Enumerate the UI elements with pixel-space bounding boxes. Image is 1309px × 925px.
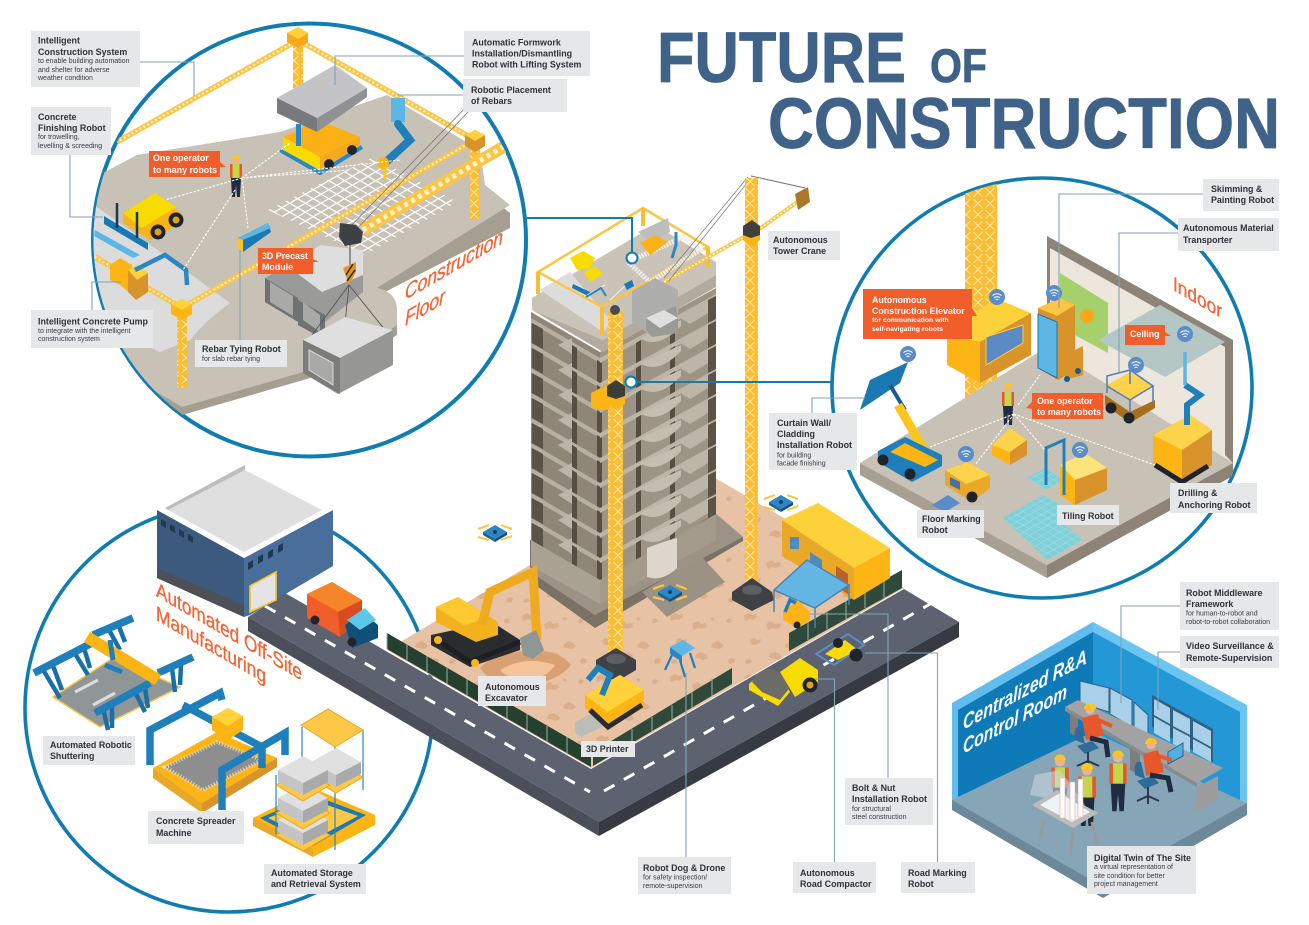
floor heading: Floor xyxy=(405,283,446,331)
label: intelligent concrete pump xyxy=(31,310,153,348)
robot: concrete pump xyxy=(110,255,187,300)
label: autonomous excavator: Excavator xyxy=(485,693,528,703)
material box xyxy=(992,428,1027,465)
drones xyxy=(478,495,798,602)
label: one operator construction floor xyxy=(149,151,226,177)
label: curtain wall: Installation Robot xyxy=(777,440,852,450)
worker xyxy=(230,155,242,197)
zoom connector: construction floor xyxy=(527,218,638,264)
label: curtain wall: Cladding xyxy=(777,429,815,439)
label: autonomous construction elevator: self-navigating robots xyxy=(872,326,943,333)
digital twin table xyxy=(1030,750,1127,855)
label: road marking robot: Robot xyxy=(908,879,934,889)
robot: concrete finishing xyxy=(94,193,184,258)
label: 3D precast module xyxy=(258,248,319,274)
robot: storage and retrieval xyxy=(253,709,375,857)
label: autonomous tower crane: Autonomous xyxy=(773,235,828,245)
label: autonomous construction elevator xyxy=(863,289,977,339)
label: automated robotic shuttering: Shuttering xyxy=(50,751,94,761)
scene: indoor xyxy=(860,180,1233,578)
label: road marking robot: Road Marking xyxy=(908,868,967,878)
scene: construction floor xyxy=(60,27,510,415)
robot: 3D printer xyxy=(575,668,644,737)
label: concrete finishing robot: levelling & screeding xyxy=(38,143,102,150)
label: robot middleware framework xyxy=(1180,582,1279,630)
operators xyxy=(1075,703,1172,804)
robot: dog xyxy=(665,640,695,677)
precast module on hook xyxy=(303,285,393,394)
truck xyxy=(307,582,378,648)
zoom connector: indoor xyxy=(626,376,833,388)
label: concrete spreader machine xyxy=(148,811,244,844)
label: concrete finishing robot: Concrete xyxy=(38,112,77,122)
label: one operator construction floor: One operator xyxy=(153,153,209,163)
title: FUTURE xyxy=(657,19,906,98)
label: digital twin of the site: Digital Twin of The Site xyxy=(1094,853,1191,863)
warehouse xyxy=(157,463,333,617)
label: 3D precast module: Module xyxy=(262,262,293,272)
label: digital twin of the site: site condition for better xyxy=(1094,873,1165,880)
label: autonomous road compactor: Road Compactor xyxy=(800,879,872,889)
wifi icons xyxy=(900,285,1193,462)
label: bolt and nut installation: for structural xyxy=(852,806,891,813)
label: skimming and painting robot: Painting Robot xyxy=(1211,195,1274,205)
label: autonomous excavator xyxy=(478,676,546,706)
panel: indoor xyxy=(832,178,1252,598)
label: intelligent construction system: weather condition xyxy=(37,75,93,82)
label: robot middleware framework: Robot Middleware xyxy=(1186,588,1262,598)
label: autonomous tower crane xyxy=(768,231,840,260)
circle outline: construction floor xyxy=(93,24,526,456)
label: curtain wall: for building xyxy=(777,452,811,460)
robot: road marking xyxy=(816,634,864,665)
label: digital twin of the site: project management xyxy=(1094,881,1158,888)
label: autonomous road compactor xyxy=(793,862,876,893)
robot: elevator xyxy=(947,298,1031,383)
floor xyxy=(952,732,1247,898)
floor heading xyxy=(405,233,502,326)
title xyxy=(657,19,1280,164)
label: autonomous excavator: Autonomous xyxy=(485,682,540,692)
label: automated robotic shuttering: Automated Robotic xyxy=(50,740,132,750)
label: curtain wall: Curtain Wall/ xyxy=(777,418,831,428)
label: robotic placement of rebars: Robotic Placement xyxy=(471,85,551,95)
robot: rebar tying xyxy=(238,223,271,252)
label: autonomous construction elevator: Construction Elevator xyxy=(872,306,965,316)
leader lines xyxy=(70,56,1203,862)
label: curtain wall: facade finishing xyxy=(777,460,826,468)
robot: excavator xyxy=(431,572,571,687)
robot: drilling and anchoring xyxy=(1153,352,1212,482)
label: ceiling: Ceiling xyxy=(1130,329,1160,339)
label: video surveillance: Remote-Supervision xyxy=(1186,653,1272,663)
label: automatic formwork: Robot with Lifting System xyxy=(472,60,582,70)
label: 3D printer xyxy=(581,741,635,757)
label: intelligent construction system: Intelligent xyxy=(38,36,80,46)
label: bolt and nut installation: steel construction xyxy=(852,814,907,821)
label: autonomous material transporter xyxy=(1178,218,1279,251)
road xyxy=(248,589,959,836)
site ground xyxy=(387,478,904,768)
walls xyxy=(952,622,1247,803)
label: intelligent construction system: and shelter for adverse xyxy=(38,67,110,74)
worker xyxy=(1002,383,1014,425)
label: 3D precast module: 3D Precast xyxy=(262,251,308,261)
label: bolt and nut installation xyxy=(845,778,933,825)
label: robot middleware framework: robot-to-robot collaboration xyxy=(1186,619,1270,626)
label: robot middleware framework: for human-to-robot and xyxy=(1186,610,1258,618)
label: drilling and anchoring xyxy=(1170,483,1257,513)
robot: road compactor xyxy=(749,658,818,706)
label: one operator indoor xyxy=(1026,393,1103,419)
label: rebar tying robot: for slab rebar tying xyxy=(202,356,260,363)
label: video surveillance: Video Surveillance & xyxy=(1186,641,1274,651)
panel: automated off-site manufacturing xyxy=(25,504,433,912)
room heading: Centralized R&A xyxy=(963,644,1087,735)
fence xyxy=(387,570,902,767)
room heading: Control Room xyxy=(963,679,1067,759)
panel: construction floor xyxy=(60,24,526,456)
label: skimming and painting robot: Skimming & xyxy=(1211,184,1263,194)
crane: autonomous tower crane xyxy=(732,176,810,611)
title: OF xyxy=(930,39,987,92)
label: bolt and nut installation: Bolt & Nut xyxy=(852,783,895,793)
label: tiling robot: Tiling Robot xyxy=(1062,511,1114,521)
label: automated storage: Automated Storage xyxy=(271,868,353,878)
label: concrete finishing robot: Finishing Robot xyxy=(38,123,106,133)
label: autonomous material transporter: Autonomous Material xyxy=(1183,223,1274,233)
label: concrete spreader machine: Machine xyxy=(156,828,192,838)
label: road marking robot xyxy=(901,862,975,893)
label: automatic formwork xyxy=(464,31,590,76)
robot: concrete spreader xyxy=(150,693,285,813)
circle outline: indoor xyxy=(832,178,1252,598)
label: robotic placement of rebars xyxy=(463,79,567,112)
label: automated storage: and Retrieval System xyxy=(271,879,361,889)
label: robot dog and drone: for safety inspection/ xyxy=(643,874,707,882)
off-site heading: Automated Off-Site xyxy=(156,577,302,685)
label: drilling and anchoring: Drilling & xyxy=(1178,488,1218,498)
robot: shuttering xyxy=(34,618,193,730)
robot: formwork lifter xyxy=(277,65,367,173)
robot: floor marking xyxy=(932,462,990,512)
label: drilling and anchoring: Anchoring Robot xyxy=(1178,500,1251,510)
indoor heading: Indoor xyxy=(1173,271,1222,323)
label: ceiling xyxy=(1125,325,1171,345)
label: autonomous construction elevator: Autonomous xyxy=(872,295,927,305)
label: intelligent construction system: to enable building automation xyxy=(38,58,130,65)
floor heading: Construction xyxy=(405,224,503,305)
label: floor marking robot: Robot xyxy=(922,525,948,535)
label: concrete finishing robot: for trowelling, xyxy=(38,134,80,141)
crane: construction elevator xyxy=(591,305,636,682)
robot: curtain wall xyxy=(860,362,942,482)
label: robot dog and drone xyxy=(638,857,731,894)
label: rebar tying robot: Rebar Tying Robot xyxy=(202,344,281,354)
label: autonomous construction elevator: for communication with xyxy=(872,317,949,324)
label: intelligent construction system: Construction System xyxy=(38,47,127,57)
panel: control room xyxy=(952,622,1247,898)
label: robot dog and drone: Robot Dog & Drone xyxy=(643,863,725,873)
label: concrete finishing robot xyxy=(31,107,111,155)
mini construction floor xyxy=(536,177,751,337)
off-site heading: Manufacturing xyxy=(156,601,266,688)
label: one operator indoor: to many robots xyxy=(1037,407,1101,417)
monitors and desk xyxy=(1065,681,1223,812)
label: floor marking robot xyxy=(917,510,984,538)
label: tiling robot xyxy=(1057,505,1119,525)
label: one operator construction floor: to many robots xyxy=(153,165,217,175)
label: robotic placement of rebars: of Rebars xyxy=(471,96,512,106)
label: automated storage xyxy=(264,864,366,894)
label: skimming and painting robot xyxy=(1203,179,1279,211)
signal lines xyxy=(165,143,400,270)
label: 3D printer: 3D Printer xyxy=(586,744,629,754)
label: floor marking robot: Floor Marking xyxy=(922,514,981,524)
robot: material transporter xyxy=(1105,370,1155,424)
robot: tiling xyxy=(1027,440,1107,505)
label: bolt and nut installation: Installation Robot xyxy=(852,794,927,804)
label: intelligent concrete pump: Intelligent Concrete Pump xyxy=(38,316,149,326)
label: rebar tying robot xyxy=(195,340,287,367)
label: intelligent concrete pump: to integrate with the intelligent xyxy=(38,328,131,335)
label: automated robotic shuttering xyxy=(43,736,135,765)
label: digital twin of the site xyxy=(1087,846,1196,894)
label: one operator indoor: One operator xyxy=(1037,396,1093,406)
robot: skimming and painting xyxy=(1038,298,1094,382)
label: curtain wall xyxy=(769,413,857,470)
precast modules xyxy=(265,223,363,340)
label: autonomous tower crane: Tower Crane xyxy=(773,246,826,256)
label: concrete spreader machine: Concrete Spreader xyxy=(156,816,236,826)
label: robot middleware framework: Framework xyxy=(1186,599,1233,609)
label: digital twin of the site: a virtual representation of xyxy=(1094,864,1173,871)
label: video surveillance xyxy=(1180,636,1279,668)
label: robot dog and drone: remote-supervision xyxy=(643,883,703,890)
signal lines xyxy=(930,375,1155,465)
site office xyxy=(782,503,890,600)
circle outline: off-site xyxy=(25,504,433,912)
label: intelligent concrete pump: construction system xyxy=(38,336,100,343)
label: automatic formwork: Installation/Dismantling xyxy=(472,48,572,58)
label: autonomous road compactor: Autonomous xyxy=(800,868,855,878)
robot: bolt and nut with canopy xyxy=(774,560,849,628)
robot: rebar placement arm xyxy=(377,98,410,178)
label: automatic formwork: Automatic Formwork xyxy=(472,38,561,48)
label: autonomous material transporter: Transporter xyxy=(1183,235,1233,245)
label: intelligent construction system xyxy=(31,31,140,87)
tower building xyxy=(530,225,743,628)
